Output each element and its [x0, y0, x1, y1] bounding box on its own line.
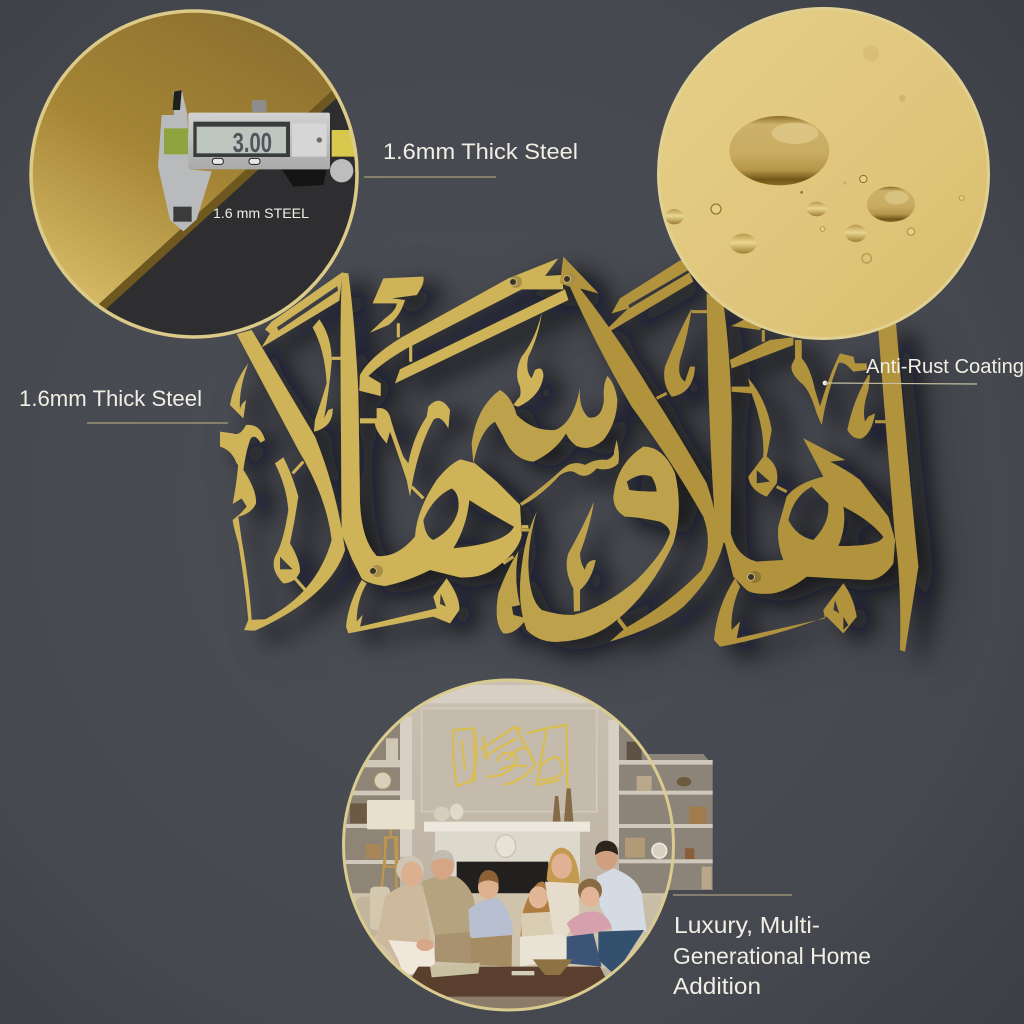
- boy: [468, 898, 513, 942]
- grandfather: [422, 875, 475, 937]
- callout: anti-rust coating: Anti-Rust Coating: [866, 356, 1024, 378]
- callout: luxury home addition: Addition: [673, 973, 761, 999]
- left shelves: [345, 722, 400, 894]
- caliper: [158, 90, 358, 231]
- right shelves inside circle: [619, 724, 672, 894]
- father: [597, 868, 647, 932]
- callout: luxury home addition: Generational Home: [673, 943, 871, 969]
- mini wall art: [453, 725, 567, 790]
- middle of calligraphy: [472, 376, 679, 642]
- mantel decor: [434, 807, 450, 821]
- wall art: gold steel calligraphy: [220, 257, 918, 652]
- sheet label: 1.6 mm STEEL: [213, 205, 309, 221]
- floor lamp: [367, 800, 415, 829]
- mounting screws on wall art: [370, 273, 761, 583]
- panel: water droplets coating circle: [658, 8, 988, 338]
- sofa: [350, 893, 670, 968]
- small girl: [567, 911, 612, 937]
- caliper reading: 3.00: [233, 127, 272, 158]
- shelves extending outside circle: [618, 754, 713, 890]
- mother: [546, 848, 580, 887]
- panel: family living room circle: [340, 680, 713, 1015]
- left half of calligraphy: [220, 258, 568, 633]
- fireplace: [435, 832, 580, 888]
- grandmother: [377, 885, 435, 975]
- floor: [448, 996, 570, 1008]
- sheet edge: [98, 90, 340, 311]
- callout: anti-rust coating: [823, 356, 1024, 385]
- callout: luxury home addition: Luxury, Multi-: [674, 912, 820, 938]
- callout: luxury home addition: [673, 895, 871, 999]
- callout: 1.6mm thick steel (top): 1.6mm Thick Steel: [383, 139, 578, 164]
- girl: [520, 882, 550, 937]
- steel sheet surface: [32, 12, 332, 304]
- room wall: [352, 682, 665, 978]
- panel: thickness close-up circle: [20, 0, 370, 345]
- callout: 1.6mm thick steel (left): 1.6mm Thick Steel: [19, 386, 202, 411]
- right half of calligraphy: [560, 257, 918, 652]
- coffee table: [412, 967, 605, 997]
